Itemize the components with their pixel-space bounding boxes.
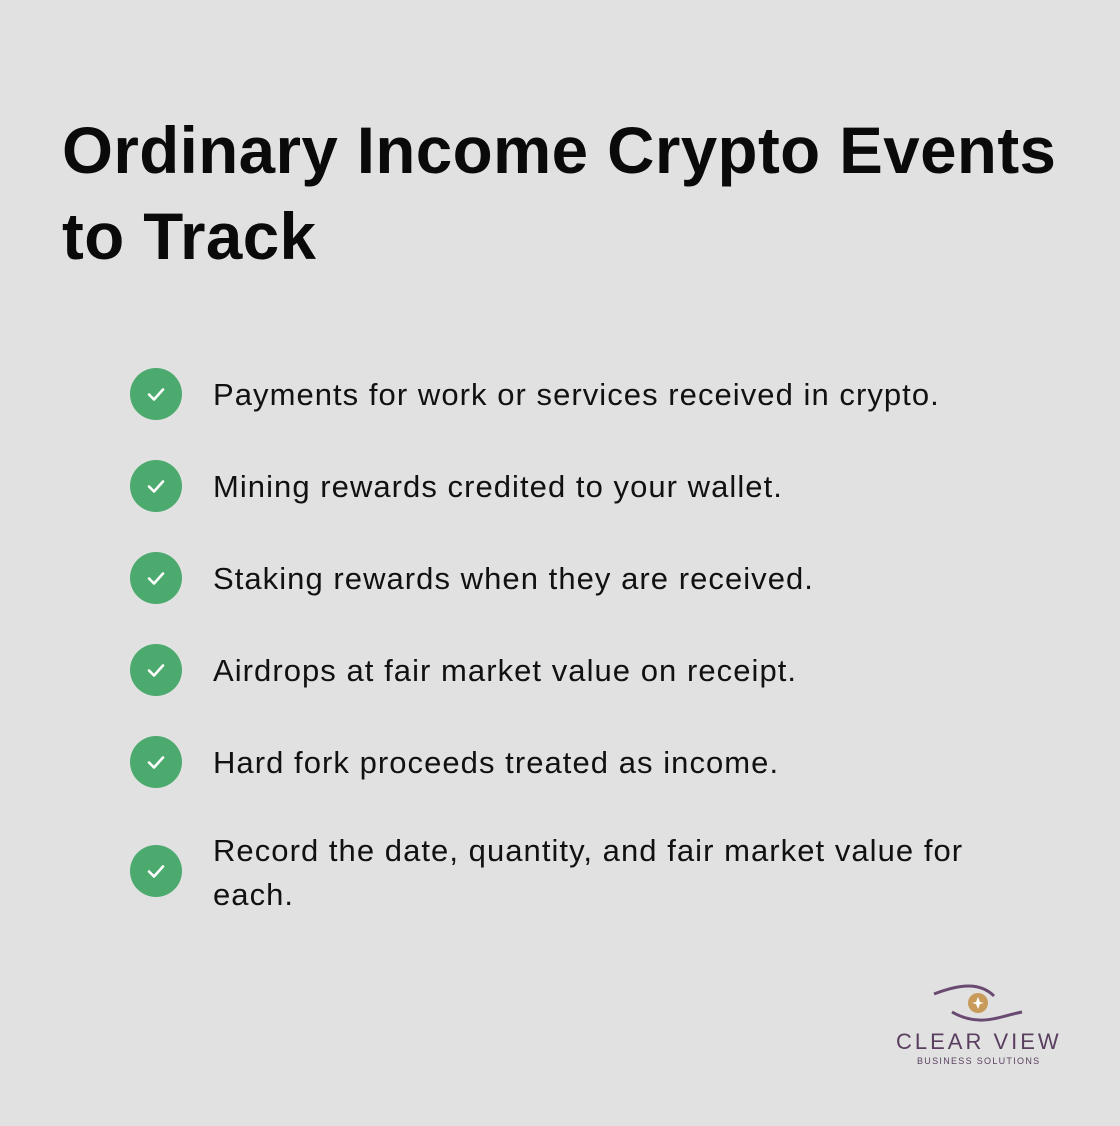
item 1: Payments for work or services received in crypto.	[213, 377, 940, 412]
item 2: Mining rewards credited to your wallet.	[213, 469, 783, 504]
item 3: Staking rewards when they are received.	[213, 561, 814, 596]
item 6: each.	[213, 877, 294, 912]
item 1	[130, 368, 940, 420]
item 5: Hard fork proceeds treated as income.	[213, 745, 779, 780]
item 3	[130, 552, 814, 604]
item 2	[130, 460, 783, 512]
logo: CLEAR VIEW	[896, 1029, 1062, 1054]
title	[62, 114, 1056, 273]
item 4: Airdrops at fair market value on receipt.	[213, 653, 797, 688]
logo: BUSINESS SOLUTIONS	[917, 1056, 1040, 1066]
title: to Track	[62, 200, 316, 273]
item 5	[130, 736, 779, 788]
title: Ordinary Income Crypto Events	[62, 114, 1056, 187]
logo	[896, 984, 1062, 1066]
item 6: Record the date, quantity, and fair market value for	[213, 833, 963, 868]
item 6	[130, 833, 963, 912]
item 4	[130, 644, 797, 696]
